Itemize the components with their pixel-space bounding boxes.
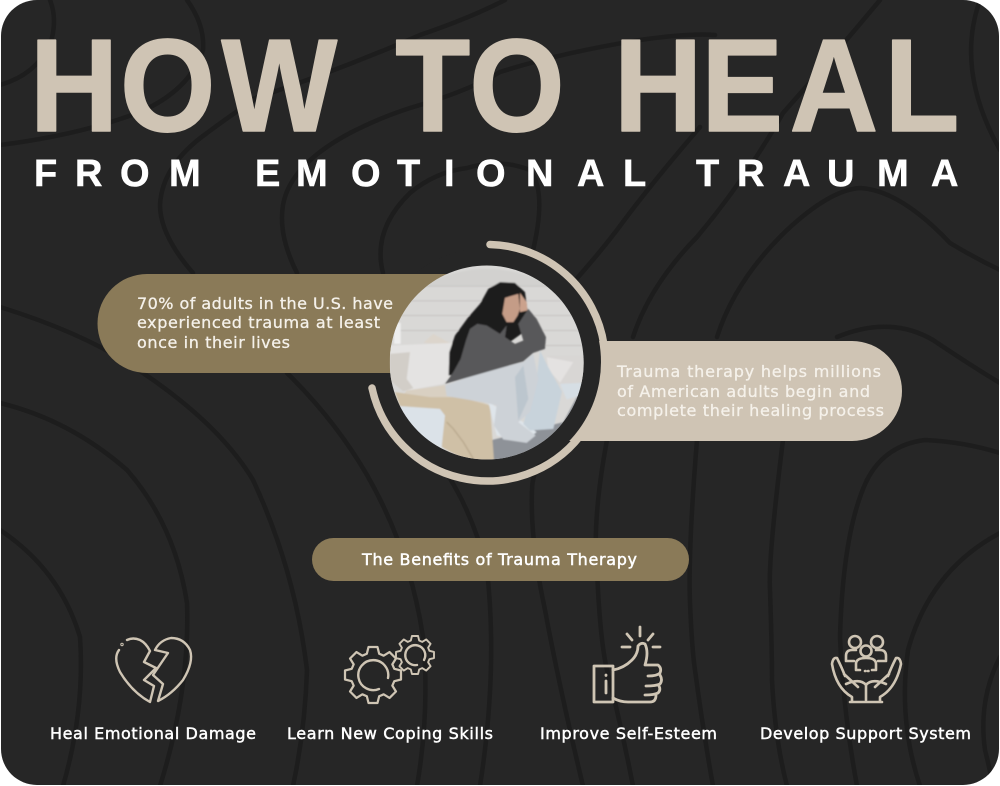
left callout pill [98,274,470,373]
subtitle: FROM EMOTIONAL TRAUMA [34,153,958,195]
benefit: improve self-esteem [540,627,717,743]
benefit: improve self-esteem: Improve Self-Esteem [540,724,717,743]
icon: hands holding people [832,636,901,702]
benefit: heal emotional damage [50,638,256,743]
callout text: 70 percent of adults: 70% of adults in the U.S. have [137,294,393,313]
benefit: develop support system: Develop Support System [760,724,971,743]
benefits heading pill [312,538,689,581]
photo: woman sitting on bed [390,266,585,460]
icon: gears [345,636,434,703]
icon: broken heart [116,638,191,702]
benefit: develop support system [760,636,971,743]
title: HOW TO HEAL [30,13,959,160]
benefits heading pill: The Benefits of Trauma Therapy [361,550,637,569]
callout text: 70 percent of adults: experienced trauma at least [137,313,380,332]
right callout pill [373,248,902,476]
benefit: learn new coping skills: Learn New Coping Skills [287,724,493,743]
callout text: therapy helps millions: complete their healing process [617,401,884,420]
benefit: learn new coping skills [287,636,493,743]
callout text: therapy helps millions: of American adults begin and [617,382,870,401]
callout text: therapy helps millions: Trauma therapy helps millions [616,362,881,381]
ring arcs around photo [372,244,604,481]
benefit: heal emotional damage: Heal Emotional Damage [50,724,256,743]
callout text: 70 percent of adults: once in their lives [137,333,290,352]
icon: thumbs up [594,627,662,702]
